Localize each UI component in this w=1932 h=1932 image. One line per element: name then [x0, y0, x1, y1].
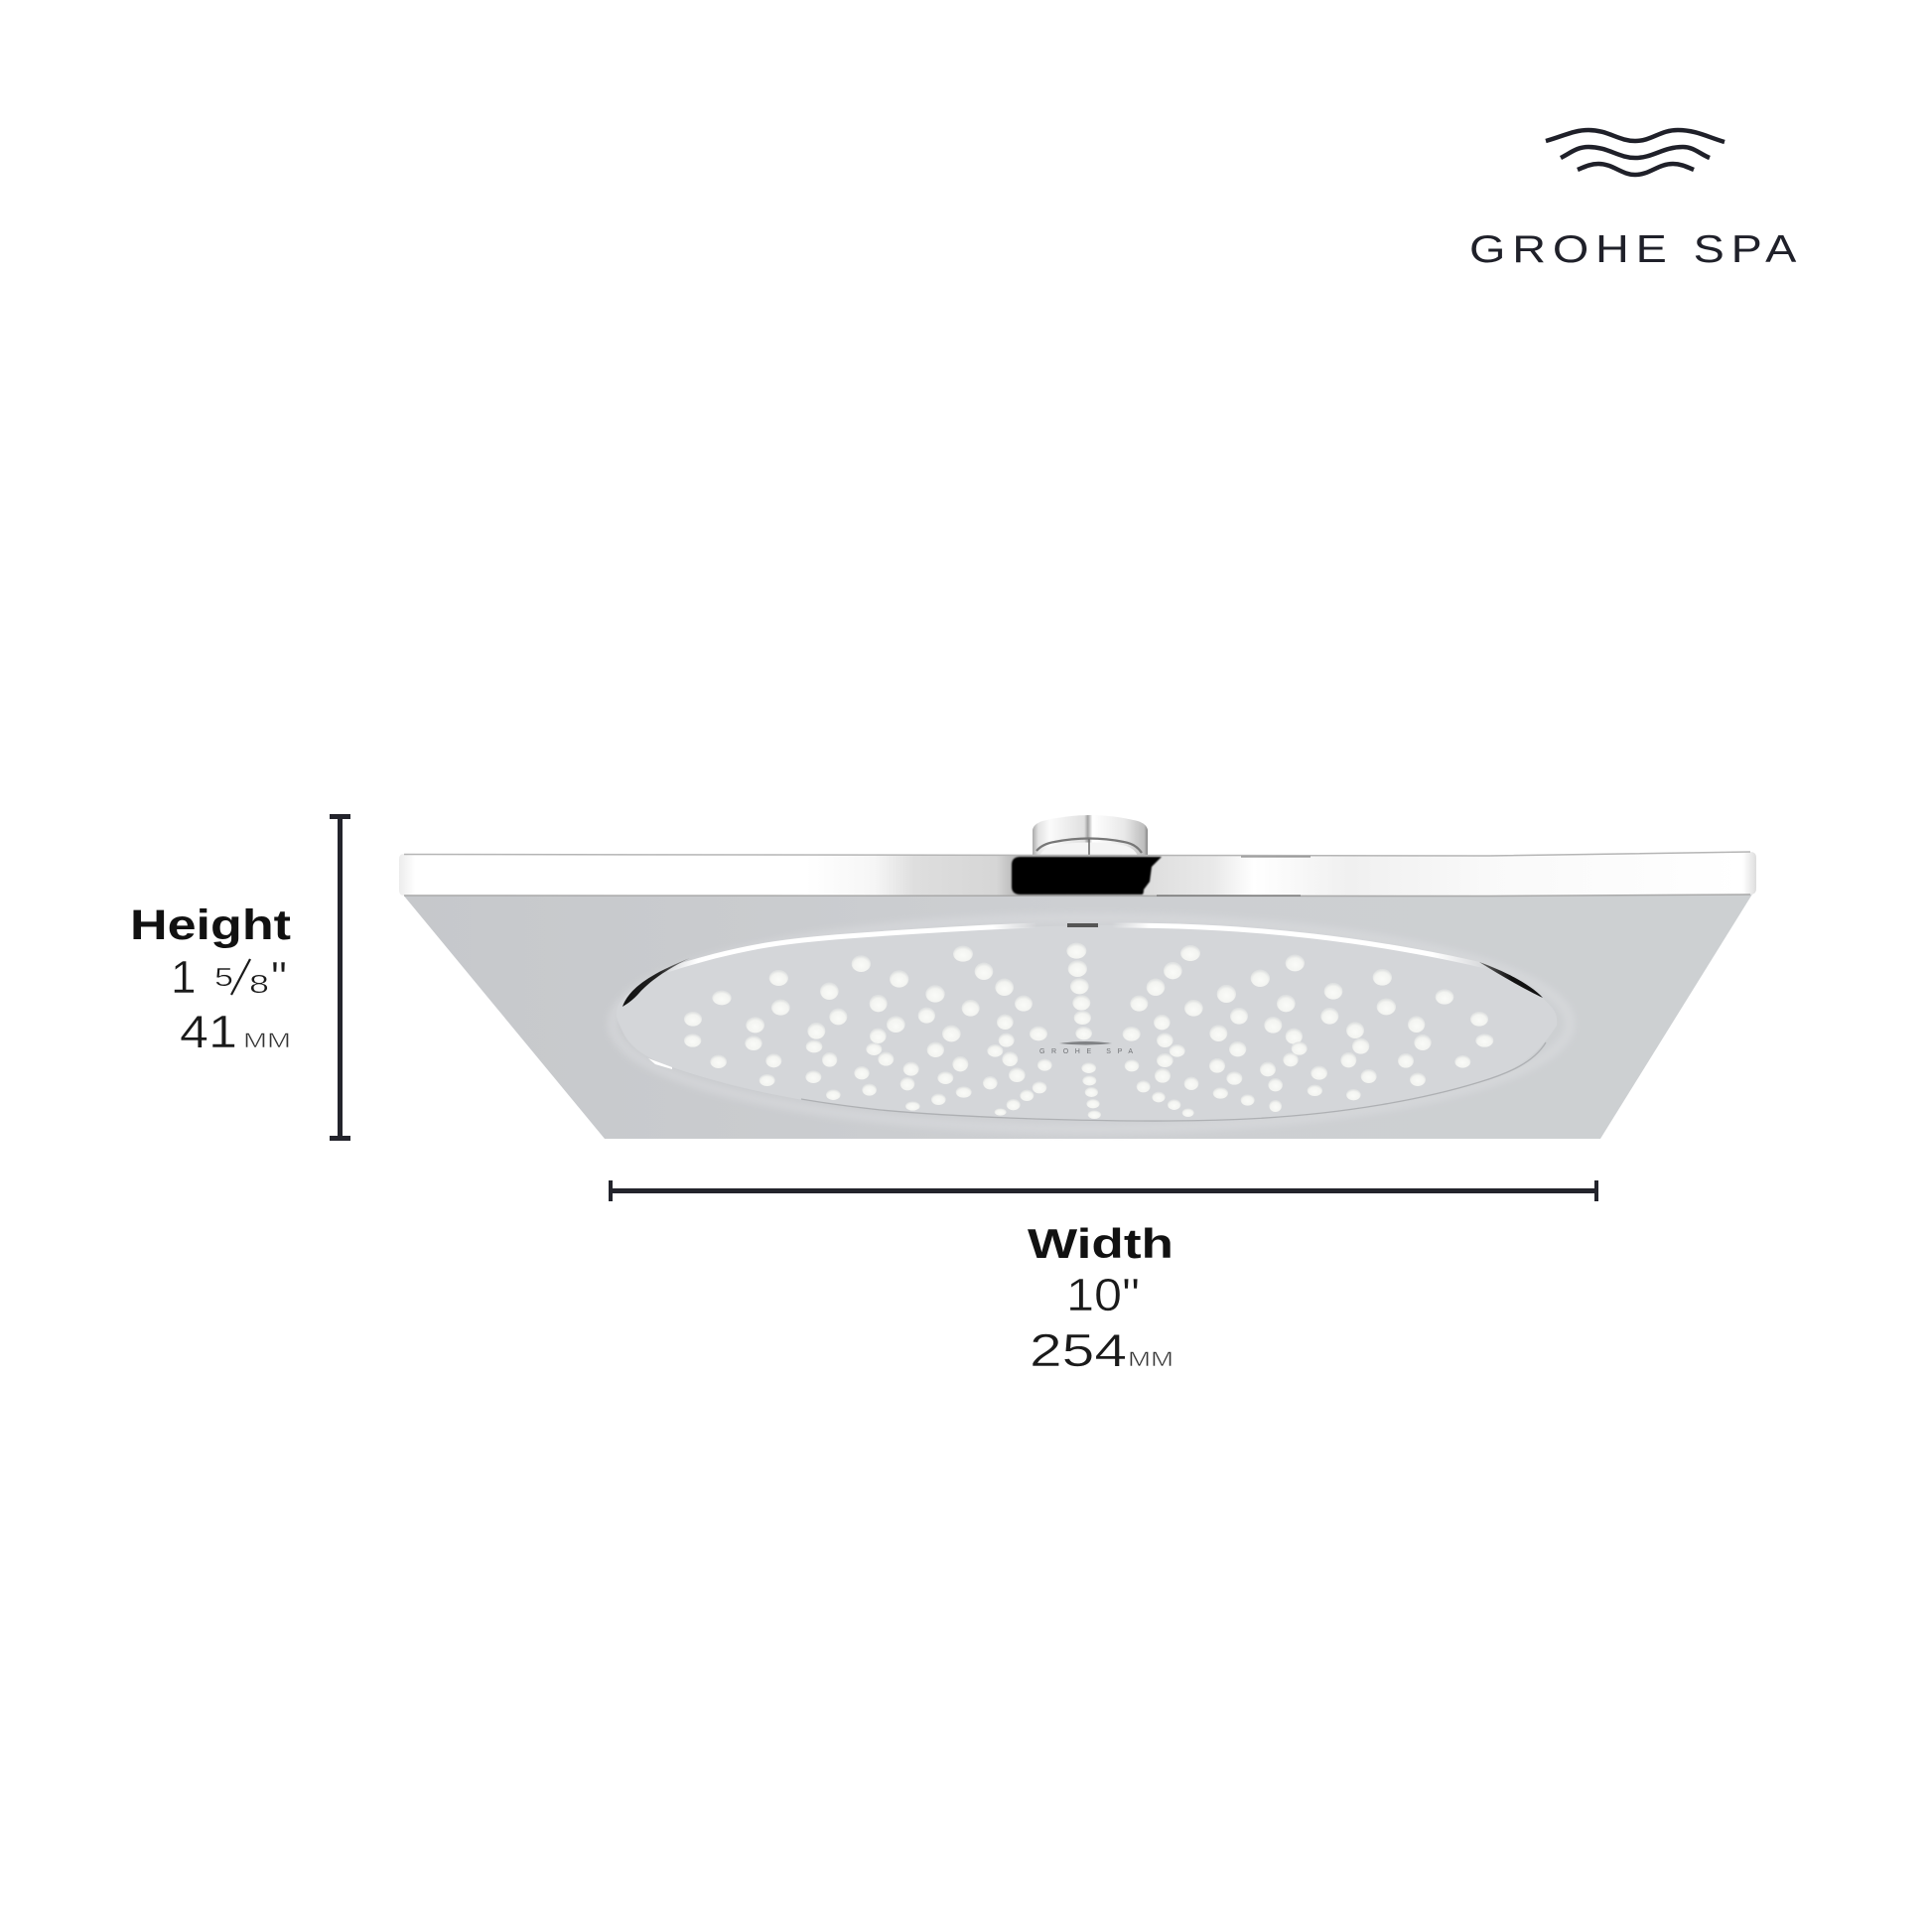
rim dark reflection left	[622, 958, 690, 1007]
height in millimetres: 41	[180, 1006, 237, 1057]
shower plate face	[402, 893, 1753, 1139]
height in inches	[171, 951, 287, 1004]
height in inches: "	[271, 952, 287, 1004]
rim notch	[1067, 923, 1098, 927]
dark reflection	[1012, 857, 1162, 895]
spray nozzles left side	[684, 943, 1092, 1116]
width in millimetres	[1030, 1324, 1173, 1376]
height in inches: 5	[214, 962, 233, 992]
rim highlight left	[667, 925, 1037, 970]
rim lower-left glint	[648, 1058, 672, 1069]
height label: Height	[130, 901, 291, 949]
rim highlight right	[1112, 925, 1489, 967]
width in inches: 10"	[1066, 1269, 1140, 1320]
faceplate logo	[1039, 1041, 1133, 1055]
collar connector	[1033, 815, 1148, 858]
width dimension bracket	[609, 1180, 1598, 1201]
width label	[1028, 1220, 1173, 1376]
spray disc	[617, 923, 1557, 1121]
height label	[130, 901, 291, 1057]
rim dark reflection right	[1479, 962, 1543, 998]
height in inches: 8	[249, 969, 269, 999]
width in millimetres: 254	[1030, 1324, 1127, 1376]
faceplate logo: GROHE SPA	[1039, 1048, 1133, 1055]
product: square rain shower head	[399, 815, 1756, 1139]
soft recess ring	[613, 918, 1570, 1129]
width in millimetres: MM	[1128, 1348, 1173, 1371]
lower rim line	[801, 1042, 1546, 1121]
logo wordmark: GROHE SPA	[1469, 228, 1797, 271]
height in millimetres: MM	[243, 1030, 291, 1052]
chrome edge band	[399, 852, 1756, 896]
icon: water waves	[1546, 130, 1725, 175]
width label: Width	[1028, 1220, 1173, 1267]
height dimension bracket	[330, 814, 350, 1141]
spray nozzles right side	[1081, 945, 1493, 1119]
logo: GROHE SPA	[1469, 130, 1797, 271]
height in millimetres	[180, 1006, 291, 1057]
height in inches: 1	[171, 951, 197, 1003]
